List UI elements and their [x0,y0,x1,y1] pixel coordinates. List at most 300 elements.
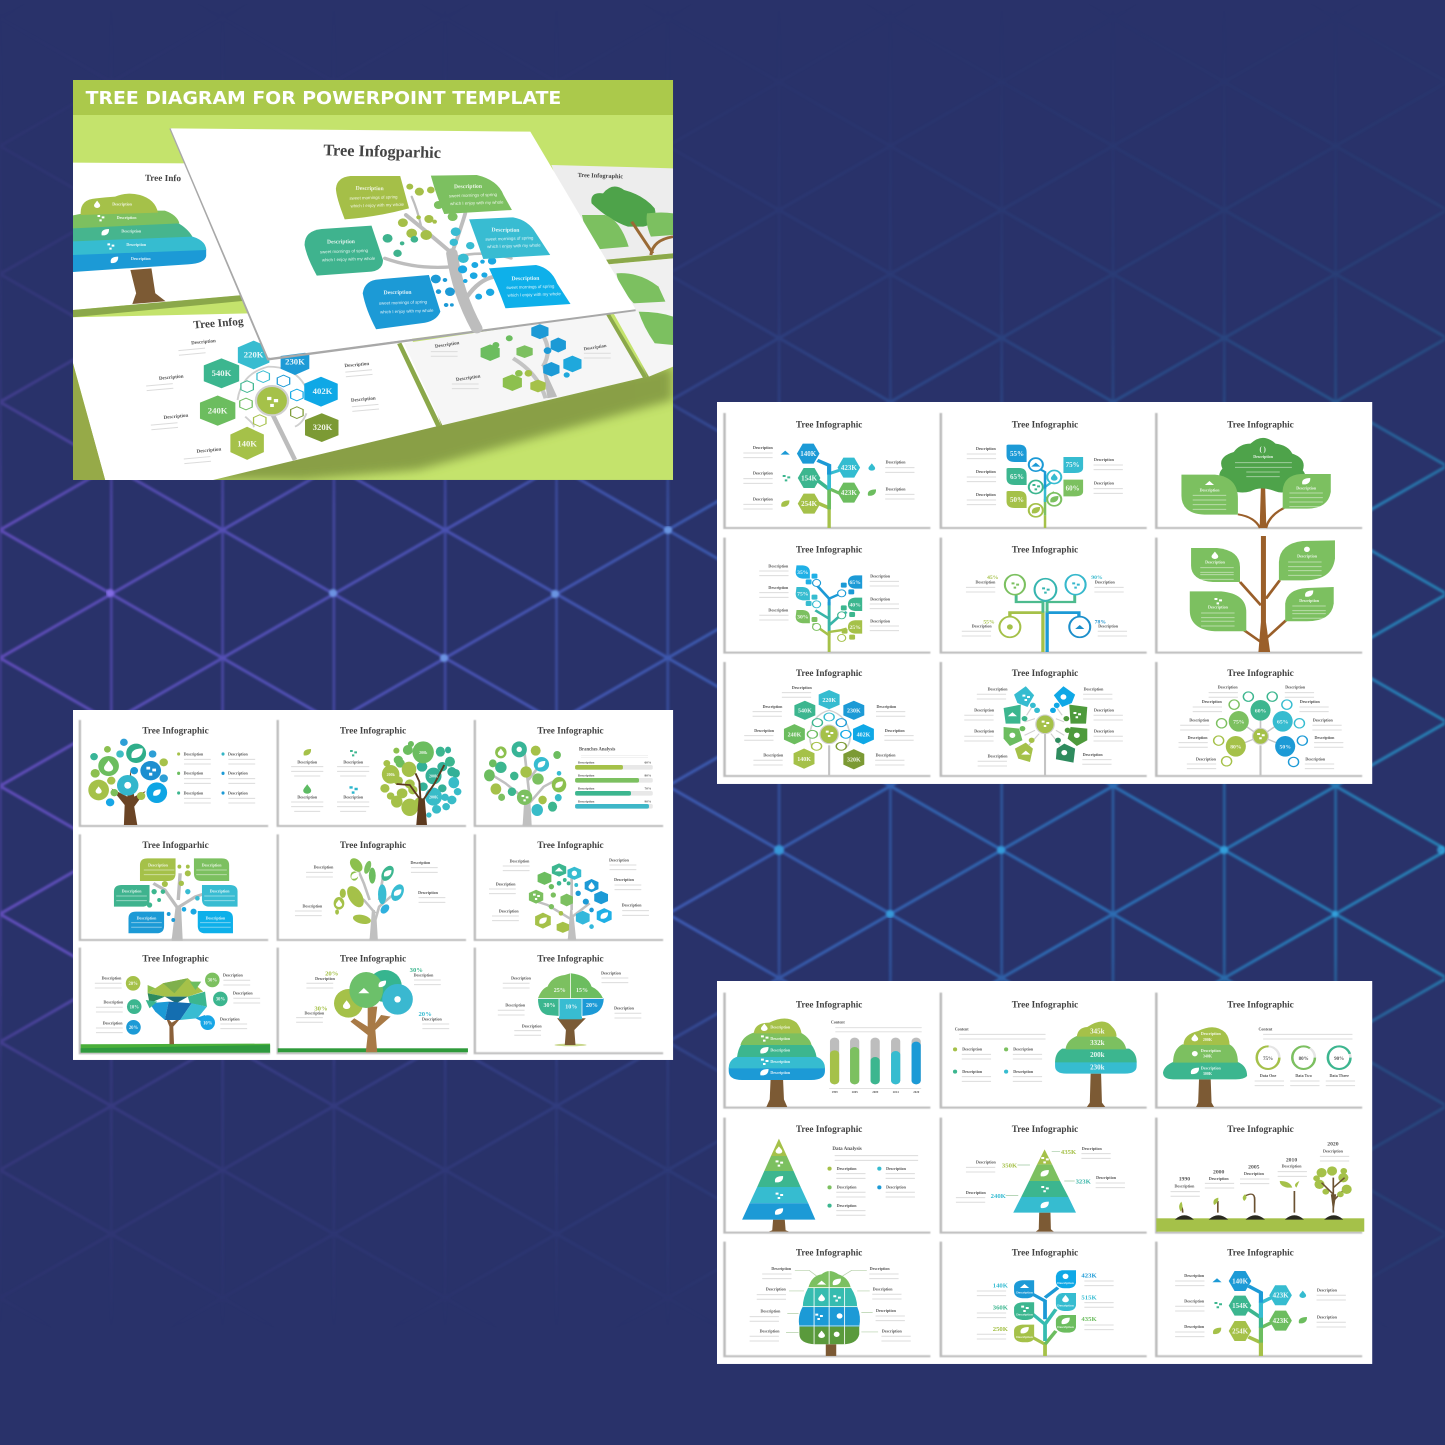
back slide: layered tree [73,163,246,317]
slide: green canopy tree: Description [1296,486,1317,491]
left descriptions: Description [191,339,216,346]
slide: rounded leaf stems: Description [1016,1291,1033,1295]
slide: four layer tree values: Description [1013,1069,1034,1074]
slide: percent stem: Description [976,469,997,474]
panel: nine slide grid upper right [717,402,1372,784]
slide: pentagon petal diagram [964,668,1123,775]
slide: hexagon stem values: Tree Infographic [796,420,862,430]
slide: circle node tree: Description [1189,718,1210,723]
slide: percent stem: Tree Infographic [1012,420,1078,430]
slide: pyramid tree data analysis: Description [837,1185,857,1190]
back slide: hexagon tree: Description [435,341,460,350]
slide: layered tree with bars [729,999,922,1107]
slide: puzzle pine tree: Tree Infographic [796,1248,862,1258]
slide: hexagon dotted tree: Description [609,857,630,862]
slide: speech bubble tree: Description [206,915,226,920]
slide: ring icons stem: Description [972,624,992,629]
main slide title: Tree Infogparhic [323,140,441,162]
slide: rounded leaf stems: Description [1016,1313,1033,1317]
slide: hexagon dotted tree: Description [499,908,519,913]
slide: branches analysis: Branches Analysis [579,747,615,752]
slide: puzzle pine tree: Description [876,1308,897,1313]
slide: circle node tree: Description [1196,756,1217,761]
slide: hexagon stem values: Description [1317,1287,1338,1292]
slide: green canopy tree: Tree Infographic [1227,420,1294,430]
bubble 2: Description [454,184,483,190]
bubble 1 [336,176,409,219]
slide: dense circle canopy tree: Description [343,795,364,800]
bubble 2 [431,175,512,214]
slide: pyramid tree values: Description [1082,1146,1103,1151]
slide: layered tree with bars: Tree Infographic [796,999,862,1009]
back slide: layered tree: Description [121,229,142,234]
slide: rounded leaf stems: Description [1057,1281,1074,1285]
slide: hexagon circle diagram: Tree Infographic [796,668,862,678]
slide: round canopy tree: Description [184,771,204,776]
slide: low poly tree: 30% [208,979,217,984]
back slide: layered tree: Tree Info [145,173,182,183]
back slides: right side [551,165,673,377]
slide: leaf square stems: Tree Infographic [796,544,862,554]
slide: cloud canopy tree: 20% [418,1011,432,1018]
bar chart: 2014 [893,1090,899,1094]
slide: pentagon petal diagram: Description [1094,729,1115,734]
slide: hexagon stem values: 140K [1232,1277,1249,1285]
slide: growth timeline: Description [1175,1183,1195,1188]
bubble 5: Description [384,290,412,296]
slide: puzzle canopy tree: Description [505,1003,526,1008]
slide: three layer tree rings: Data Three [1330,1073,1349,1078]
slide: three layer tree rings: 75% [1263,1057,1273,1062]
slide: percent stem: Description [1094,457,1115,462]
slide: puzzle canopy tree: Description [522,1023,542,1028]
slide: four leaf tree: Description [1297,554,1318,559]
hero heading: TREE DIAGRAM FOR POWERPOINT TEMPLATE [86,87,561,109]
slide: circle node tree: Description [1313,718,1333,723]
slide: hexagon stem values: 140K [800,450,817,458]
slide: four leaf tree: Description [1205,560,1226,565]
slide: ring icons stem: 90% [1091,575,1103,581]
bubble 1: Description [356,186,385,192]
back slide: hexagon data: Tree Infog [193,316,244,332]
hexagon values: 240K [208,405,228,415]
slide: cloud canopy tree: 20% [325,970,339,977]
grown tree foliage [1313,1166,1352,1197]
back slide: hexagon tree [404,313,647,425]
slide: growth timeline: 1990 [1179,1177,1190,1183]
slide: low poly tree: 20% [128,982,138,987]
slide: hexagon stem values: Description [753,496,774,501]
slide: puzzle canopy tree [498,953,641,1046]
slide: growth timeline: 2005 [1248,1165,1260,1171]
progress bars: 90% [645,799,652,803]
slide: hexagon circle diagram: Description [876,704,897,709]
slide: hexagon circle diagram [744,668,914,775]
slide: growth timeline: Tree Infographic [1227,1124,1294,1134]
slide: rounded leaf stems: Description [1016,1335,1033,1339]
slide: puzzle pine tree: Description [766,1287,787,1292]
bubble 3 [305,226,383,276]
slide: round canopy tree: Tree Infographic [142,726,209,736]
slide: circle node tree: Tree Infographic [1227,668,1294,678]
slide: growth timeline: 2000 [1213,1169,1225,1175]
slide: pyramid tree values: Description [1096,1175,1117,1180]
slide: low poly tree: Description [223,973,243,978]
back slide: layered tree: Description [131,256,151,261]
slide: pyramid tree data analysis: Data Analysis [832,1147,862,1152]
slide: percent stem [967,420,1123,528]
slide: hexagon stem values: 423K [1273,1292,1289,1300]
slide: green canopy tree: Description [1253,454,1274,459]
slide: puzzle canopy tree: 25% [554,988,566,994]
slide: dense circle canopy tree: 200k [419,750,428,755]
slide: percent stem: 75% [1066,461,1080,469]
slide: hexagon stem values: Description [1184,1298,1205,1303]
slide: four leaf tree: Description [1299,598,1320,603]
slide: pentagon petal diagram: Description [988,754,1008,759]
slide: pyramid tree values: Tree Infographic [1012,1124,1078,1134]
progress bars: Description [578,760,594,764]
slide: circle node tree: 60% [1255,708,1267,714]
bubble 4 [469,217,550,259]
slide: hexagon stem values: 254K [1232,1327,1249,1335]
background lattice pattern [0,209,1445,1236]
slide: hexagon circle diagram: 540K [798,709,812,715]
slide: puzzle canopy tree: 20% [586,1003,598,1009]
slide: puzzle pine tree: Description [870,1266,890,1271]
slide: circle node tree: Description [1188,735,1208,740]
slide: circle node tree: Description [1315,735,1335,740]
slide: percent stem: 60% [1066,484,1080,492]
hexagon values [200,341,338,460]
slide: branches analysis [484,726,653,825]
slide: four layer tree values: 200k [1090,1051,1105,1059]
bubble 3: Description [327,239,356,246]
slide: rounded leaf stems: Description [1057,1303,1074,1307]
slide: leaf tree: Description [303,903,323,908]
slide: ring icons stem: 78% [1095,619,1106,625]
hexagon values: 540K [212,368,232,378]
slide: low poly tree: Tree Infographic [142,953,209,963]
slide: speech bubble tree: Description [137,915,157,920]
slide: leaf square stems: 25% [849,625,861,631]
slide: circle node tree: Description [1305,756,1326,761]
slide: hexagon circle diagram: Description [763,704,783,709]
slide: rounded leaf stems [977,1248,1114,1356]
progress bars: Description [578,773,594,777]
slide: hexagon dotted tree: Description [510,858,530,863]
slide: dense circle canopy tree: Description [297,759,318,764]
progress bars: 60% [645,760,652,764]
slide: growth timeline: Description [1282,1164,1302,1169]
slide: hexagon stem values: Description [1184,1324,1205,1329]
slide: pentagon petal diagram: Description [988,687,1008,692]
bar chart: 2009 [872,1090,879,1094]
panel: hero slide perspective mockup [73,80,673,480]
slide: layered tree with bars: Description [770,1048,791,1053]
slide: speech bubble tree: Tree Infogparhic [142,840,209,850]
hexagon values: 402K [313,386,333,396]
slide: speech bubble tree: Description [210,889,230,894]
bubble 1: sweet mornings of spring [349,194,398,201]
bubble 5 [363,275,440,329]
slide: puzzle canopy tree: 30% [543,1003,555,1009]
slide: dense circle canopy tree: Description [343,759,364,764]
slide: circle node tree: 50% [1280,744,1291,750]
slide: branches analysis: Tree Infographic [537,726,604,736]
slide: hexagon circle diagram: 140K [797,757,811,763]
slide: hexagon dotted tree: Description [614,877,635,882]
slide: pyramid tree data analysis: Description [837,1203,857,1208]
back slide: layered tree: Description [126,242,147,247]
slide: low poly tree [81,953,270,1053]
slide: hexagon circle diagram: Description [754,728,775,733]
slide: four layer tree values [953,999,1137,1107]
slide: round canopy tree: Description [228,751,248,756]
slide: pentagon petal diagram: Description [1094,708,1115,713]
slide: three layer tree rings: Data Two [1295,1073,1312,1078]
slide: puzzle canopy tree: 15% [576,988,588,994]
slide: three layer tree rings: Tree Infographic [1227,999,1294,1009]
slide: hexagon stem values: 423K [1273,1317,1289,1325]
slide: pentagon petal diagram: Description [1084,687,1104,692]
slide: hexagon stem values: Tree Infographic [1227,1248,1294,1258]
slide: leaf square stems: Description [870,596,891,601]
slide: hexagon circle diagram: 320K [847,758,861,764]
slide: pentagon petal diagram: Description [974,708,995,713]
slide: leaf square stems: Description [870,574,891,579]
slide: circle node tree: 80% [1230,744,1242,750]
slide: hexagon stem values: Description [753,445,774,450]
slide: rounded leaf stems: 140K [993,1282,1009,1289]
slide: hexagon stem values: Description [886,460,906,465]
slide: three layer tree rings: Content [1259,1027,1273,1032]
slide: leaf square stems: 65% [849,580,861,586]
slide: hexagon stem values: 423K [841,464,857,472]
slide: three layer tree rings: 80% [1299,1057,1309,1062]
back slide: layered tree: Description [117,215,137,220]
slide: growth timeline: Description [1323,1148,1344,1153]
slide: cloud canopy tree: Description [414,973,434,978]
slide: pyramid tree data analysis [742,1124,918,1232]
slide: pyramid tree data analysis: Description [886,1166,907,1171]
slide: low poly tree: Description [103,1020,123,1025]
left descriptions [141,325,383,466]
slide: puzzle pine tree [750,1248,911,1356]
slide: low poly tree: 30% [216,998,225,1003]
slide: percent stem: 55% [1010,450,1024,458]
slide: leaf tree [295,840,445,939]
slide: leaf square stems: Description [768,608,789,613]
progress bars: Description [578,799,594,803]
slide: leaf square stems: 30% [797,614,809,620]
slide: puzzle pine tree: Description [771,1266,792,1271]
slide: leaf tree: Description [411,860,431,865]
slide: low poly tree: 20% [129,1026,138,1031]
bubble 3: sweet mornings of spring [320,248,369,254]
slide: three layer tree rings: Data One [1260,1073,1276,1078]
slide: pyramid tree values: 323K [1076,1178,1092,1185]
slide: leaf square stems: Description [870,618,891,623]
bubble 4: sweet mornings of spring [485,235,534,242]
bubble 3: which I enjoy with my whole [322,256,376,262]
slide: puzzle pine tree: Description [760,1309,781,1314]
slide: hexagon circle diagram: Description [763,753,784,758]
slide: pyramid tree values [956,1124,1125,1232]
slide: circle node tree: Description [1300,699,1320,704]
progress bars [575,760,653,809]
slide: pyramid tree data analysis: Description [837,1166,857,1171]
back slide: hexagon tree: Description [583,344,607,352]
slide: low poly tree: Description [102,976,122,981]
bar chart: 2005 [852,1090,858,1094]
slide: round canopy tree: Description [184,790,204,795]
slide: four layer tree values: Tree Infographic [1012,999,1078,1009]
slide: leaf tree: Description [314,865,334,870]
bubble 5: sweet mornings of spring [379,299,428,306]
slide: hexagon stem values: Description [753,471,774,476]
slide: growth timeline: Description [1209,1176,1229,1181]
slide: four layer tree values: 230k [1090,1064,1105,1072]
slide: dense circle canopy tree: Description [297,795,318,800]
hexagon values: 140K [237,439,257,449]
slide: pyramid tree values: Description [966,1190,987,1195]
bubble 2: sweet mornings of spring [449,192,498,198]
slide: four layer tree values: Description [962,1047,983,1052]
ring charts [1257,1046,1350,1069]
slide: pentagon petal diagram: Description [974,729,995,734]
hero floor shadow [73,367,673,480]
gray tree [385,197,511,328]
slide: hexagon stem values: Description [886,486,906,491]
slide: speech bubble tree [114,840,238,939]
slide: cloud canopy tree: Description [315,976,336,981]
slide: speech bubble tree: Description [122,889,142,894]
bubble 4: Description [491,227,520,234]
bar chart: 1999 [832,1090,838,1094]
progress bars: 80% [645,773,652,777]
slide: pyramid tree values: Description [976,1160,997,1165]
slide: growth timeline [1156,1124,1364,1232]
slide: leaf square stems: 40% [849,602,861,608]
slide: pyramid tree values: 240K [991,1193,1007,1200]
slide: dense circle canopy tree: 200K [429,794,439,799]
slide: layered tree with bars: Description [770,1025,791,1030]
main slide: tree infographic with speech bubbles [171,128,636,359]
slide: cloud canopy tree: Description [422,1017,442,1022]
slide: percent stem: Description [976,446,997,451]
slide: hexagon dotted tree: Description [622,903,642,908]
panel: nine slide grid lower right [717,981,1372,1364]
slide: percent stem: Description [1094,481,1115,486]
slide: circle node tree: Description [1218,685,1238,690]
hexagon values: 220K [244,349,264,359]
bubble 2: which I enjoy with my whole [450,200,504,206]
slide: rounded leaf stems: 423K [1081,1273,1097,1280]
slide: percent stem: Description [976,492,997,497]
slide: puzzle pine tree: Description [873,1286,893,1291]
slide: dense circle canopy tree: 200k [387,772,396,777]
slide: circle node tree: Description [1285,685,1306,690]
bubble 1: which I enjoy with my whole [351,202,405,208]
slide: leaf tree: Tree Infographic [340,840,406,850]
slide: round canopy tree [88,726,255,825]
slide: low poly tree: 10% [130,1005,139,1010]
slide: pyramid tree values: 435K [1061,1149,1077,1156]
bubble 5: which I enjoy with my whole [380,308,434,314]
slide: low poly tree: Description [104,1000,124,1005]
slide: hexagon stem values: Description [1184,1273,1205,1278]
slide: four layer tree values: Description [962,1069,983,1074]
slide: percent stem: 50% [1010,496,1024,504]
slide: hexagon circle diagram: 240K [788,733,802,739]
bubble 6: which I enjoy with my whole [507,291,562,298]
left descriptions: Description [196,448,222,455]
slide: green canopy tree: ( ) [1259,445,1267,453]
progress bars: 70% [645,786,652,790]
slide: ring icons stem: Tree Infographic [1012,544,1078,554]
slide: three layer tree rings: 90% [1334,1057,1344,1062]
left descriptions: Description [163,414,189,421]
slide: round canopy tree: Description [228,771,248,776]
slide: puzzle canopy tree: 10% [565,1005,577,1011]
slide: three layer tree rings: 300K [1203,1071,1213,1076]
slide: layered tree with bars: Description [770,1059,791,1064]
hexagon values: 320K [313,422,333,432]
bar chart [829,1038,921,1094]
slide: four layer tree values: Content [955,1027,969,1032]
slide: hexagon circle diagram: Description [876,753,896,758]
slide: growth timeline: 2010 [1286,1157,1297,1163]
slide: growth timeline: 2020 [1327,1142,1339,1148]
slide: layered tree with bars: Content [831,1019,845,1024]
slide: puzzle canopy tree: Description [601,970,622,975]
slide: layered tree with bars: Description [770,1036,791,1041]
slide: leaf square stems: 35% [797,570,809,576]
slide: leaf tree: Description [418,890,439,895]
slide: pyramid tree values: 350K [1002,1162,1018,1169]
slide: dense circle canopy tree [291,726,461,825]
slide: circle node tree [1178,668,1343,775]
slide: hexagon dotted tree: Description [496,881,516,886]
slide: ring icons stem: 55% [983,619,995,625]
slide: ring icons stem: 45% [987,575,999,581]
slide: circle node tree: Description [1202,699,1222,704]
slide: pentagon petal diagram: Tree Infographic [1012,668,1078,678]
slide: three layer tree rings: 200K [1203,1037,1213,1042]
slide: leaf square stems: Description [768,563,789,568]
slide: cloud canopy tree: 30% [314,1005,328,1012]
tree dots [383,184,496,307]
bar chart: 2020 [913,1090,920,1094]
slide: hexagon circle diagram: 220K [822,698,836,704]
slide: three layer tree rings [1163,999,1355,1107]
slide: pyramid tree data analysis: Tree Infographic [796,1124,862,1134]
slide: three layer tree rings: Description [1201,1031,1221,1036]
slide: hexagon stem values: 423K [841,489,857,497]
slide: puzzle pine tree: Description [760,1328,780,1333]
slide: ring icons stem: Description [1095,580,1115,585]
slide: three layer tree rings: 340K [1203,1054,1213,1059]
left descriptions: Description [344,362,370,369]
bubble 6: Description [511,276,540,282]
back slide: hexagon tree: Description [456,374,481,383]
slide: circle node tree: 65% [1277,719,1289,725]
slide: rounded leaf stems: 435K [1081,1316,1097,1323]
back slides: right side: Tree Infographic [577,172,623,180]
slide: dense circle canopy tree: Tree Infographic [340,726,406,736]
back slide: hexagon data [73,310,441,480]
